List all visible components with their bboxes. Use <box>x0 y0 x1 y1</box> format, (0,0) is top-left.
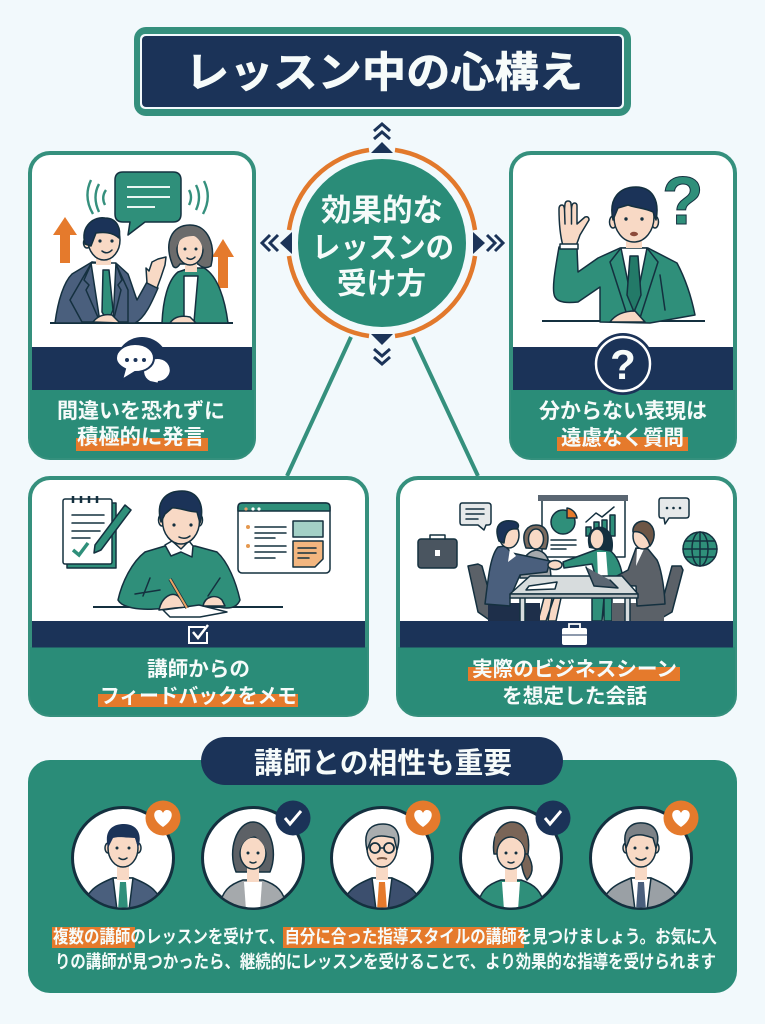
badge: heart <box>146 800 180 836</box>
title banner <box>134 27 631 116</box>
body text with highlights <box>52 926 717 972</box>
badge: check <box>276 800 310 836</box>
caption: 間違いを恐れずに <box>57 400 225 423</box>
illustration: man raising hand <box>542 163 705 323</box>
avatar: young man <box>72 808 174 910</box>
title banner: レッスン中の心構え <box>185 49 583 96</box>
bubbles, briefcase, globe <box>418 498 717 568</box>
connector lines <box>287 337 478 476</box>
table and handshake <box>510 560 638 622</box>
caption: 積極的に発言 <box>77 426 205 449</box>
hub text: 効果的な <box>321 193 443 228</box>
woman <box>162 225 228 323</box>
icon band: question mark <box>513 333 733 395</box>
icon band: question mark: ? <box>610 341 636 388</box>
panel: business scene <box>398 478 735 715</box>
caption: フィードバックをメモ <box>100 685 297 708</box>
hub text <box>312 193 454 301</box>
arrows: four directions <box>262 124 503 364</box>
hub text: 受け方 <box>337 268 426 301</box>
chairs <box>468 564 683 619</box>
caption: 遠慮なく質問 <box>561 427 684 450</box>
orange arrows <box>53 217 234 288</box>
browser window <box>238 503 330 573</box>
caption <box>539 400 707 451</box>
seated man, left <box>485 521 550 621</box>
caption: 分からない表現は <box>539 400 707 423</box>
caption: 実際のビジネスシーン <box>472 658 677 681</box>
illustration: business meeting <box>418 495 717 622</box>
heading pill: 講師との相性も重要 <box>254 747 512 780</box>
panel: teacher compatibility <box>28 737 737 993</box>
seated woman, right <box>563 527 623 621</box>
central hub <box>262 124 503 364</box>
hub text: レッスンの <box>312 232 454 265</box>
caption: 講師からの <box>147 658 250 681</box>
heading pill <box>201 737 563 785</box>
illustration: man taking notes <box>63 491 330 617</box>
icon band: checkbox <box>32 621 365 648</box>
notepad and pen <box>63 496 131 568</box>
caption <box>57 400 225 451</box>
notebook <box>163 605 227 617</box>
avatar: woman with ponytail <box>460 808 562 910</box>
question mark: ? <box>662 163 704 239</box>
seated man, right <box>612 521 665 621</box>
panel: note feedback <box>30 478 367 715</box>
badge: heart <box>664 800 698 836</box>
illustration: two colleagues talking <box>50 172 234 323</box>
caption <box>468 658 680 708</box>
avatar: woman with bob <box>202 808 304 910</box>
badge: heart <box>406 800 440 836</box>
caption: を想定した会話 <box>502 685 647 708</box>
panel: speak actively <box>30 153 254 458</box>
icon band: speech bubbles <box>32 337 252 390</box>
presentation board <box>538 495 628 557</box>
caption <box>98 658 298 708</box>
man <box>55 218 166 323</box>
badge: check <box>536 800 570 836</box>
panel: ask questions <box>511 153 735 458</box>
person <box>118 491 240 617</box>
orange ring <box>289 150 475 336</box>
avatar: older man with glasses <box>332 808 432 910</box>
avatar: senior man <box>590 808 692 910</box>
icon band: briefcase <box>400 621 733 648</box>
seated woman, back left <box>520 525 561 621</box>
speech bubble with sound waves <box>87 172 208 235</box>
